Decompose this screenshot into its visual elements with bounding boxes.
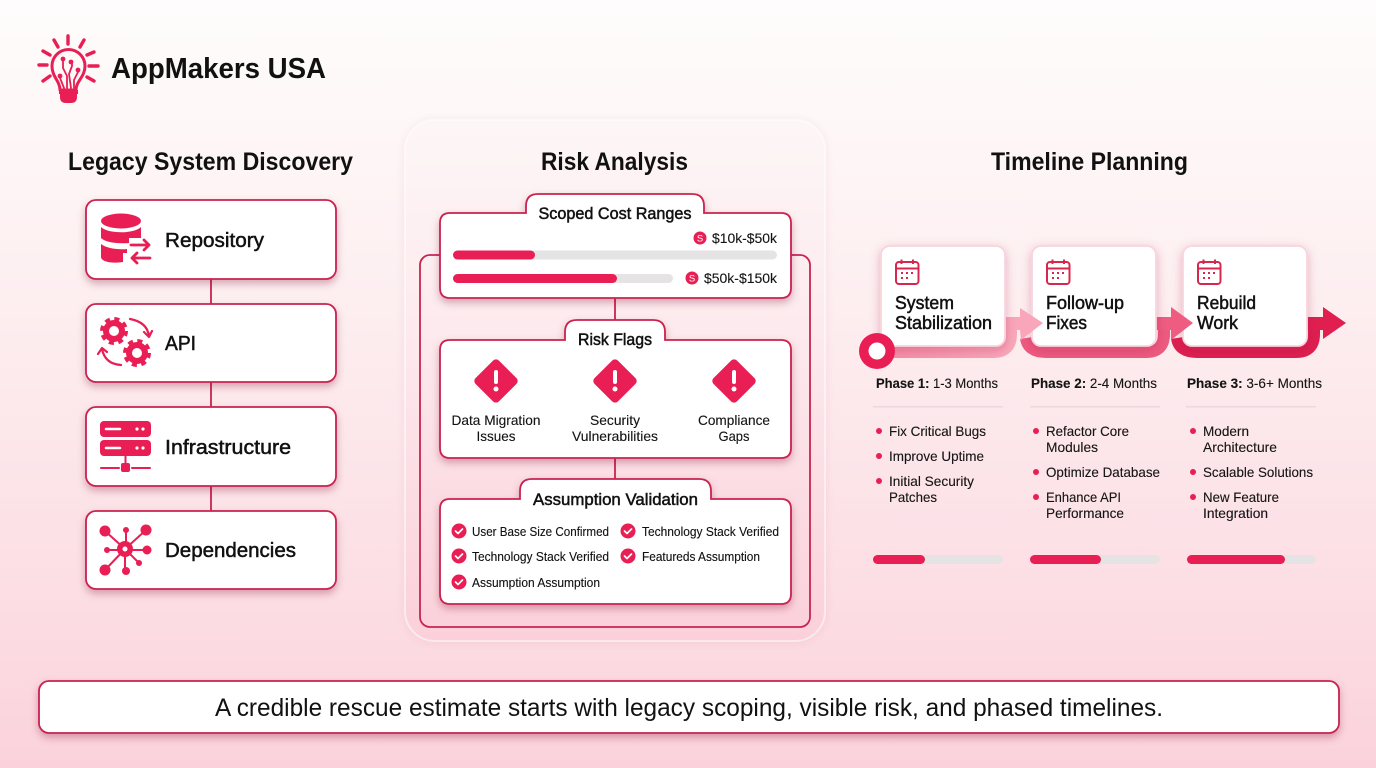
- heading: Risk Analysis: [541, 148, 688, 176]
- icon: calendar: [1198, 260, 1220, 284]
- phase 3 details: [1186, 375, 1322, 564]
- brand name: AppMakers USA: [111, 53, 326, 85]
- heading: Timeline Planning: [991, 148, 1188, 176]
- task list: Enhance API: [1046, 489, 1121, 505]
- label: Repository: [165, 230, 264, 252]
- checklist item: Featureds Assumption: [642, 550, 760, 564]
- phase 1 card: Stabilization: [895, 313, 992, 333]
- task list: Modern: [1203, 423, 1249, 439]
- takeaway banner: [39, 681, 1339, 733]
- range: $10k-$50k: $10k-$50k: [712, 230, 778, 246]
- phase 2 card: [1032, 246, 1156, 346]
- flag: Compliance Gaps: Gaps: [718, 428, 750, 444]
- icon: network: [100, 524, 152, 576]
- progress bar: [873, 555, 1003, 564]
- flag: Security Vulnerabilities: Vulnerabilities: [572, 428, 658, 444]
- duration: Phase 2: 2-4 Months: [1031, 375, 1157, 391]
- task list: Scalable Solutions: [1203, 464, 1313, 480]
- heading: Assumption Validation: [533, 491, 698, 509]
- phase 2 details: [1030, 375, 1160, 564]
- icon: server: [100, 421, 151, 472]
- flag: Security Vulnerabilities: [572, 358, 658, 444]
- checklist item: Assumption Assumption: [472, 576, 600, 590]
- card: API: [86, 304, 336, 382]
- flag: Data Migration Issues: Data Migration: [452, 412, 540, 428]
- heading: Risk Flags: [578, 331, 652, 349]
- task list: Refactor Core: [1046, 423, 1129, 439]
- duration: Phase 1: 1-3 Months: [876, 375, 998, 391]
- task list: Optimize Database: [1046, 464, 1160, 480]
- task list: Initial Security: [889, 473, 974, 489]
- timeline start marker: [859, 333, 895, 369]
- task list: [1190, 423, 1313, 521]
- range: $10k-$50k: [453, 230, 778, 260]
- task list: Patches: [889, 489, 937, 505]
- phase 2 card: Fixes: [1046, 313, 1087, 333]
- range: $10k-$50k: S: [697, 234, 703, 244]
- task list: Architecture: [1203, 439, 1277, 455]
- task list: [1033, 423, 1160, 521]
- card: Infrastructure: [86, 407, 336, 486]
- flag: Compliance Gaps: [698, 358, 770, 444]
- task list: Fix Critical Bugs: [889, 423, 986, 439]
- logo: AppMakers USA: [39, 36, 326, 103]
- phase 1 details: [873, 375, 1003, 564]
- task list: Modules: [1046, 439, 1098, 455]
- arrow: phase 3: [1177, 307, 1346, 352]
- label: API: [165, 333, 196, 355]
- phase 3 card: [1183, 246, 1307, 346]
- icon: gears: [98, 319, 152, 365]
- checklist item: User Base Size Confirmed: [472, 525, 609, 539]
- range: $50k-$150k: [453, 270, 778, 286]
- task list: Improve Uptime: [889, 448, 984, 464]
- task list: New Feature: [1203, 489, 1279, 505]
- arrow: phase 1: [877, 308, 1043, 352]
- duration: Phase 3: 3-6+ Months: [1187, 375, 1322, 391]
- range: $50k-$150k: S: [689, 274, 695, 284]
- progress bar: [1030, 555, 1160, 564]
- task list: Integration: [1203, 505, 1268, 521]
- panel: Risk Analysis: [405, 120, 825, 641]
- title: Follow-up: [1046, 293, 1124, 313]
- label: Dependencies: [165, 540, 296, 562]
- column: Timeline Planning: [859, 148, 1346, 564]
- task list: Performance: [1046, 505, 1124, 521]
- icon: database sync: [101, 214, 150, 263]
- label: Infrastructure: [165, 437, 291, 459]
- phase 1 card: [881, 246, 1005, 346]
- card: Assumption Validation: [440, 479, 791, 604]
- column: Legacy System Discovery: [68, 148, 353, 589]
- card: Risk Flags: [440, 320, 791, 458]
- arrow: phase 2: [1026, 307, 1193, 352]
- heading: Scoped Cost Ranges: [538, 205, 692, 223]
- flag: Data Migration Issues: [452, 358, 540, 444]
- flag: Compliance Gaps: Compliance: [698, 412, 770, 428]
- takeaway text: A credible rescue estimate starts with legacy scoping, visible risk, and phased timelines.: [215, 694, 1163, 722]
- flag: Data Migration Issues: Issues: [476, 428, 516, 444]
- icon: calendar: [896, 260, 918, 284]
- card: Dependencies: [86, 511, 336, 589]
- progress bar: [1187, 555, 1316, 564]
- title: System: [895, 293, 954, 313]
- card: Scoped Cost Ranges: [440, 194, 791, 298]
- icon: light bulb: [39, 36, 98, 103]
- checklist item: Technology Stack Verified: [642, 525, 779, 539]
- range: $50k-$150k: $50k-$150k: [704, 270, 778, 286]
- checklist item: Technology Stack Verified: [472, 550, 609, 564]
- phase 3 card: Work: [1197, 313, 1239, 333]
- task list: [876, 423, 986, 505]
- heading: Legacy System Discovery: [68, 148, 353, 176]
- title: Rebuild: [1197, 293, 1256, 313]
- card: Repository: [86, 200, 336, 279]
- flag: Security Vulnerabilities: Security: [590, 412, 640, 428]
- icon: calendar: [1047, 260, 1070, 284]
